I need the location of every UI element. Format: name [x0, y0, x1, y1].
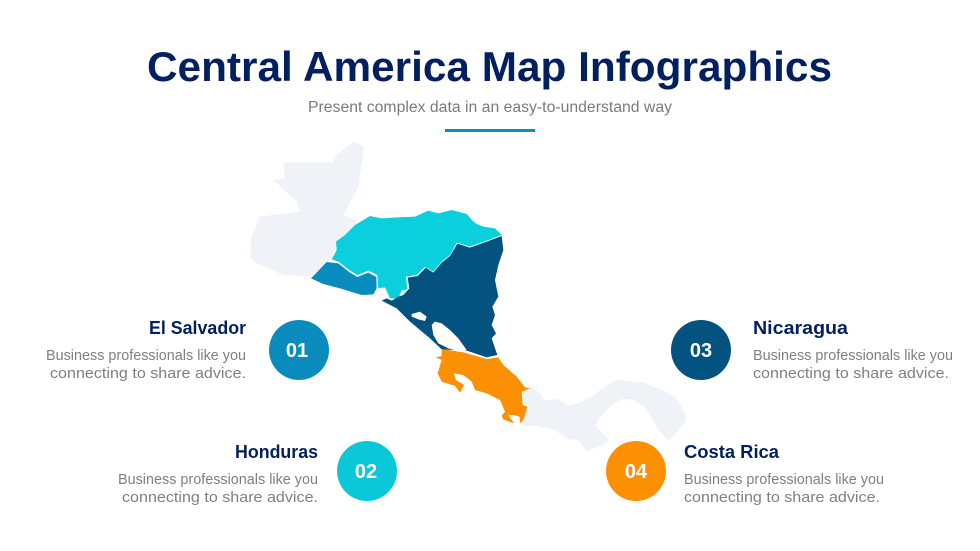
country: Nicaragua	[382, 236, 503, 357]
lake Managua	[412, 312, 427, 321]
description	[753, 347, 953, 382]
map of Central America	[250, 142, 685, 450]
description: Business professionals like you	[684, 471, 884, 488]
number badge 04	[606, 441, 666, 501]
country: Panama	[522, 381, 685, 450]
item 02: Honduras	[118, 441, 397, 506]
item 04: Costa Rica	[606, 441, 884, 506]
country: Guatemala and Belize	[250, 142, 363, 277]
number badge 03: 03	[690, 340, 712, 362]
description	[118, 471, 318, 506]
title: Central America Map Infographics	[147, 43, 832, 90]
country: El Salvador	[311, 262, 377, 295]
description	[684, 471, 884, 506]
country: Honduras	[332, 210, 502, 298]
description: Business professionals like you	[118, 471, 318, 488]
description: connecting to share advice.	[753, 365, 949, 382]
item 01: El Salvador	[46, 317, 329, 382]
heading: Honduras	[235, 441, 318, 462]
description: connecting to share advice.	[122, 489, 318, 506]
number badge 02	[337, 441, 397, 501]
number badge 02: 02	[355, 461, 377, 483]
number badge 04: 04	[625, 461, 648, 483]
number badge 01: 01	[286, 340, 308, 362]
heading: El Salvador	[149, 317, 246, 338]
description: Business professionals like you	[46, 347, 246, 364]
description: Business professionals like you	[753, 347, 953, 364]
subtitle: Present complex data in an easy-to-understand way	[308, 99, 672, 116]
description	[46, 347, 246, 382]
description: connecting to share advice.	[50, 365, 246, 382]
item 03: Nicaragua	[671, 317, 953, 382]
heading: Nicaragua	[753, 317, 849, 338]
country: Costa Rica	[436, 349, 530, 424]
lake Nicaragua	[432, 322, 467, 352]
number badge 01	[269, 320, 329, 380]
title underline accent	[445, 129, 535, 132]
number badge 03	[671, 320, 731, 380]
heading: Costa Rica	[684, 441, 780, 462]
description: connecting to share advice.	[684, 489, 880, 506]
